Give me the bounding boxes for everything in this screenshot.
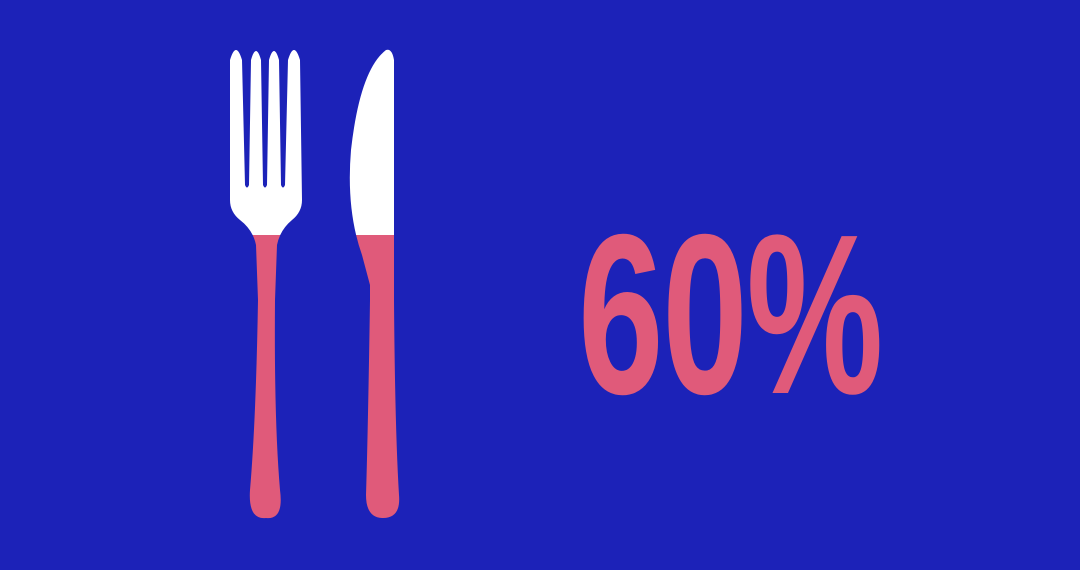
illustration: fork and knife	[230, 50, 400, 518]
icon: knife	[350, 50, 399, 518]
icon: fork	[230, 50, 302, 518]
statistic: 60%: 60%	[578, 188, 882, 442]
